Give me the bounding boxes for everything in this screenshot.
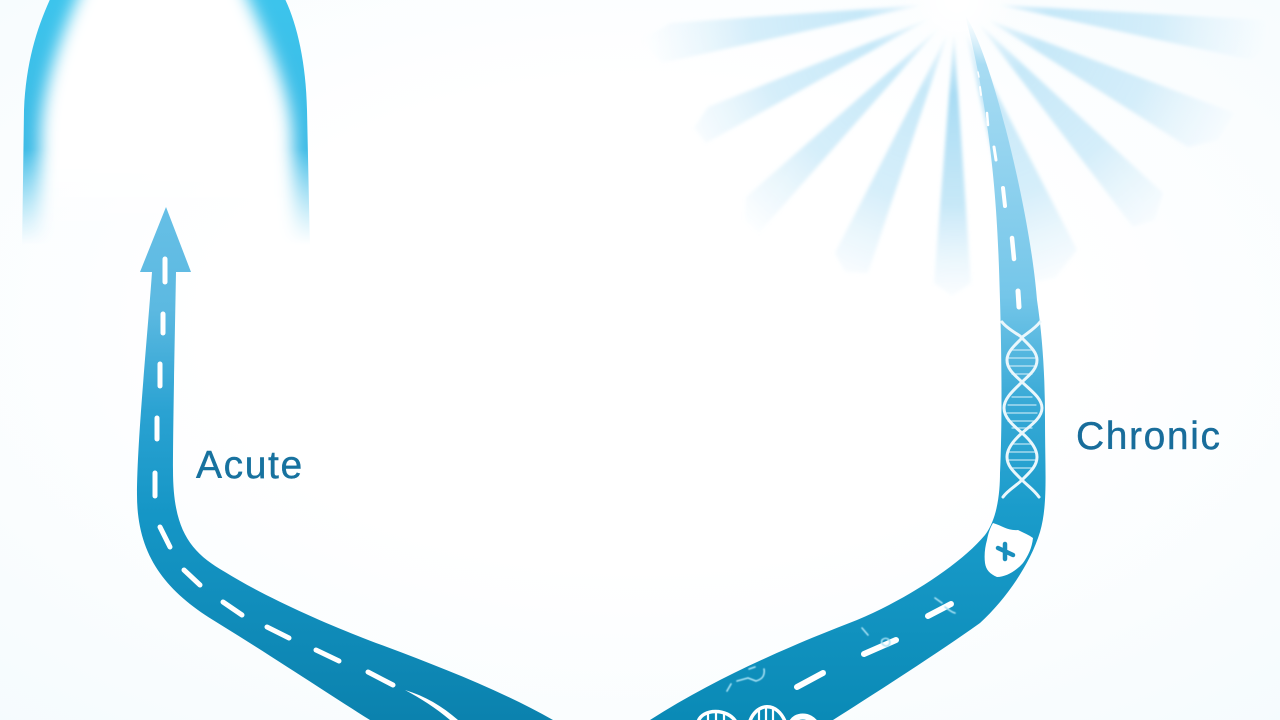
sunburst rays — [640, 5, 1276, 296]
icon: shield with cross — [985, 523, 1033, 577]
sun glow — [921, 0, 993, 36]
helix rungs — [1007, 350, 1037, 468]
icon: DNA helix on road — [1002, 322, 1042, 497]
lane dashes — [155, 259, 393, 685]
upper lane dashes — [978, 72, 1019, 307]
label: Acute: Acute — [196, 444, 304, 487]
icon: DNA fragments at bottom — [698, 706, 816, 720]
road body with arrowhead — [137, 207, 553, 720]
acute road arrow — [137, 207, 553, 720]
road body — [650, 15, 1046, 720]
bright lane streak — [405, 690, 458, 720]
glowing arch doorway — [22, 0, 310, 239]
helix strands — [1002, 322, 1042, 497]
faint molecular squiggles — [727, 598, 955, 691]
lower lane dashes — [797, 604, 951, 687]
label: Chronic: Chronic — [1076, 415, 1222, 458]
chronic road — [650, 15, 1046, 720]
